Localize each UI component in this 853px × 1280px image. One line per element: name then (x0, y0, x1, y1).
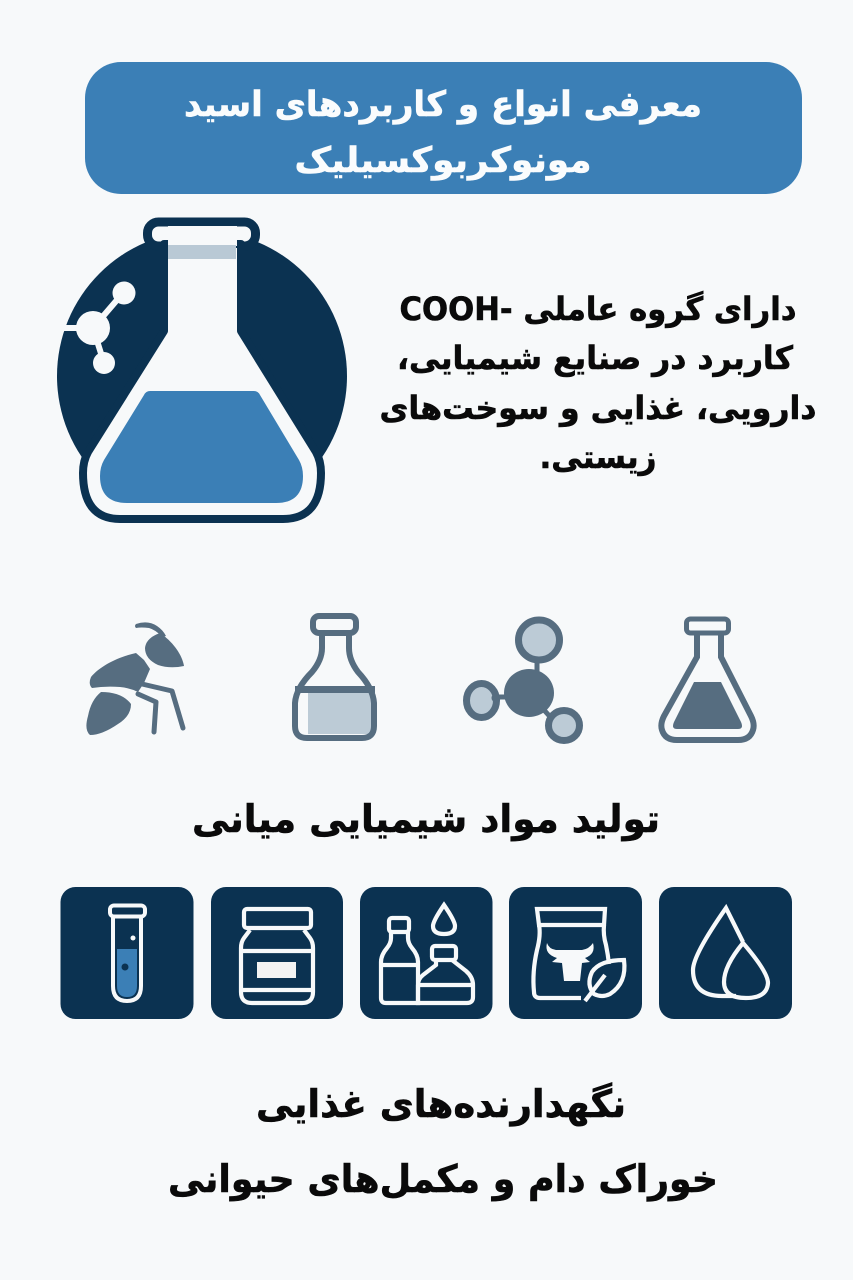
tile: bottles and drop (360, 887, 492, 1019)
icon: bottle (295, 616, 375, 738)
title banner: معرفی انواع و کاربردهای اسید (184, 85, 702, 125)
intro text block: دارویی، غذایی و سوخت‌های (380, 389, 816, 427)
icon: small flask (661, 619, 754, 740)
title banner: مونوکربوکسیلیک (294, 141, 592, 181)
intro text block (380, 290, 816, 476)
icon: large flask with molecule (57, 222, 347, 521)
intro text block: کاربرد در صنایع شیمیایی، (397, 339, 793, 377)
text: animal feed and supplements: خوراک دام و مکمل‌های حیوانی (168, 1157, 718, 1202)
intro text block: دارای گروه عاملی -COOH (400, 290, 796, 328)
tile: test tube (60, 887, 194, 1019)
title banner (85, 62, 802, 194)
icon: molecule (466, 620, 580, 740)
heading: intermediate chemicals: تولید مواد شیمیایی میانی (192, 797, 660, 841)
tile: animal feed bag with leaf (509, 887, 642, 1019)
icon: ant (86, 622, 184, 735)
tile: water drops (659, 887, 792, 1019)
text: food preservatives: نگهدارنده‌های غذایی (256, 1082, 626, 1126)
intro text block: زیستی. (540, 438, 656, 476)
tile: jar (211, 887, 343, 1019)
